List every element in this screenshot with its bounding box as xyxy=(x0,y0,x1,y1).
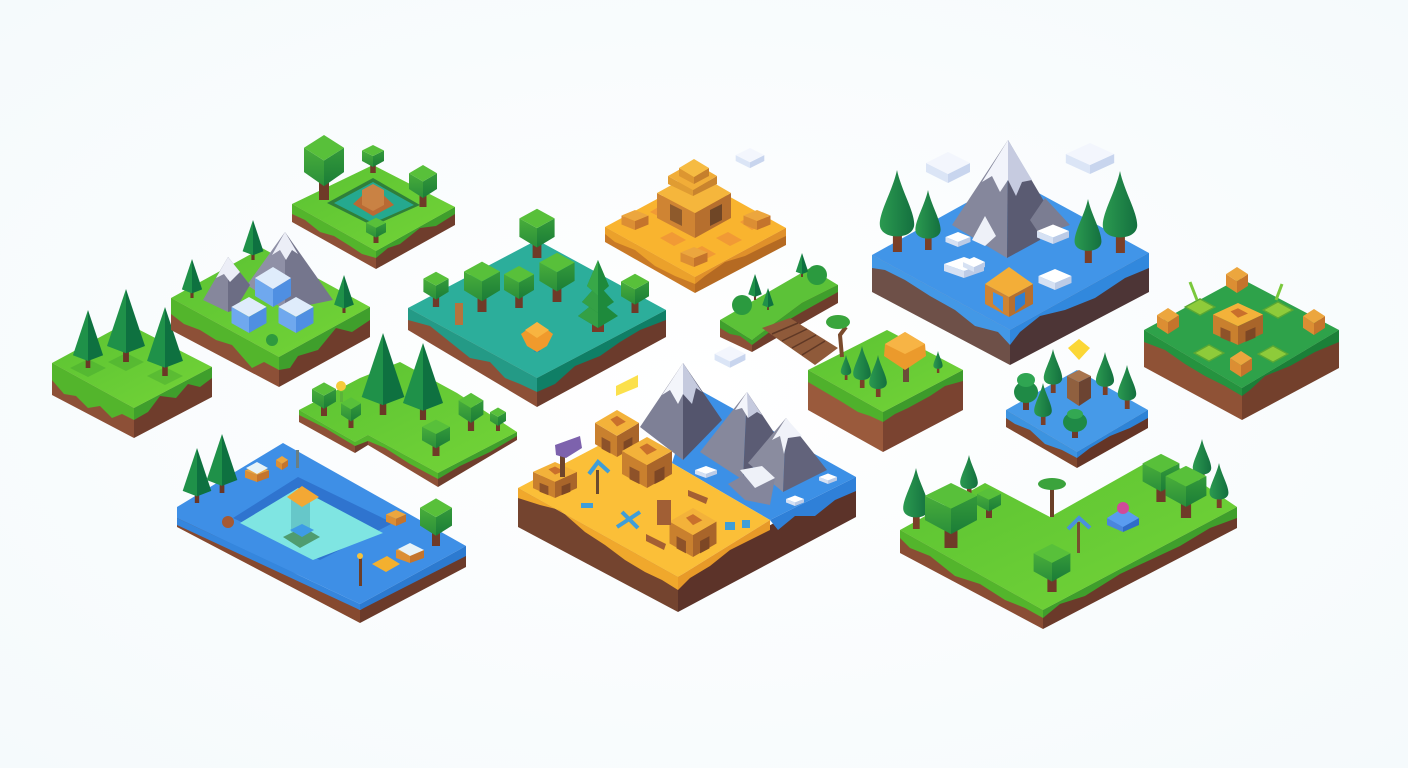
snow blocks xyxy=(944,224,1072,290)
bush xyxy=(266,334,278,346)
island: dark green with orange blocks xyxy=(1144,267,1339,420)
totem xyxy=(455,303,463,325)
cube tree xyxy=(420,498,452,546)
plots xyxy=(1185,299,1293,362)
clouds xyxy=(926,143,1114,183)
small cloud xyxy=(715,346,745,368)
pines xyxy=(880,170,1137,263)
arch xyxy=(985,267,1033,317)
pines xyxy=(903,439,1228,529)
pines xyxy=(841,346,943,397)
stump xyxy=(353,184,394,216)
cube trees xyxy=(304,135,437,243)
tower xyxy=(1067,370,1091,406)
island: ice cubes and mountains xyxy=(171,220,370,387)
pickaxe xyxy=(1068,518,1090,553)
island: blue ring with pool xyxy=(177,434,466,623)
island: grass block with orange tree xyxy=(808,315,963,452)
temple xyxy=(657,159,731,238)
yellow flag xyxy=(616,375,638,396)
pines xyxy=(183,434,237,503)
pool water xyxy=(240,488,383,560)
sprouts xyxy=(1190,282,1282,300)
small blocks xyxy=(622,210,770,267)
ice slabs xyxy=(695,466,837,506)
round tree xyxy=(1014,373,1038,410)
layered pine xyxy=(578,260,618,332)
twisted tree xyxy=(826,315,850,357)
orange blocks xyxy=(1157,267,1325,377)
ice cubes xyxy=(232,267,314,333)
island: L-shaped meadow xyxy=(900,439,1237,629)
island: desert and ice with mountains xyxy=(518,363,856,612)
orange tree xyxy=(521,322,553,352)
island: L-shaped grass with pines xyxy=(299,333,517,487)
blue block with gem xyxy=(1107,502,1139,532)
trees xyxy=(1044,349,1136,409)
pine trees xyxy=(182,220,354,313)
trees xyxy=(732,253,827,315)
palm xyxy=(1038,478,1066,517)
signpost xyxy=(555,436,582,477)
crates and props xyxy=(222,450,424,586)
island: snowy mountain on water xyxy=(872,140,1149,365)
mountains xyxy=(640,363,827,505)
island: teal forest xyxy=(408,209,666,407)
pavilion xyxy=(283,486,320,548)
wooden bridge xyxy=(762,318,838,365)
island: small blue with tower xyxy=(1006,339,1148,468)
yellow flower xyxy=(336,381,346,402)
island: grove with teal pond xyxy=(292,135,455,269)
yellow blocks xyxy=(533,410,716,557)
mountains xyxy=(203,232,333,312)
island: golden temple xyxy=(605,159,786,293)
pines xyxy=(362,333,443,420)
blue tools and props xyxy=(581,490,750,550)
sun gem xyxy=(1068,339,1090,360)
cube trees xyxy=(423,209,649,313)
mountain xyxy=(952,140,1070,258)
pickaxe icon xyxy=(589,462,609,494)
island: small hill with bridge xyxy=(720,253,838,365)
tree shadows xyxy=(70,353,183,385)
foreground trees xyxy=(1034,383,1087,438)
cloud xyxy=(736,148,764,168)
floor tiles xyxy=(650,206,762,260)
orange tree xyxy=(884,332,926,382)
island: grass with three pines xyxy=(52,289,212,438)
pond xyxy=(327,178,420,226)
cube trees xyxy=(925,454,1206,592)
pine trees xyxy=(73,289,183,376)
bushes xyxy=(312,382,506,456)
